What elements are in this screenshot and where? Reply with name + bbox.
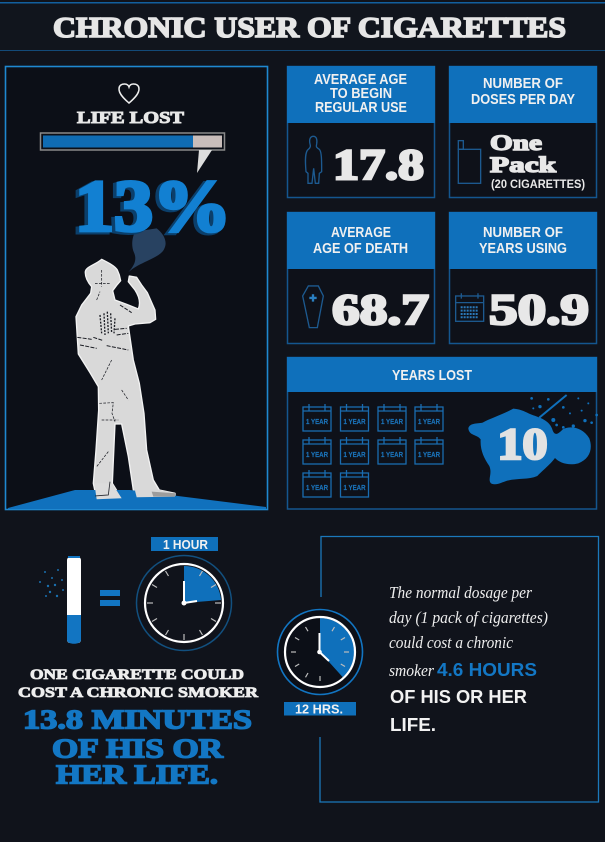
callout pointer [197, 150, 212, 173]
big percentage: 13% [72, 167, 228, 248]
panel: normal dosage frame [320, 536, 598, 802]
label: 12 hrs: 12 HRS. [295, 702, 343, 716]
shoes over floor [94, 482, 175, 499]
calendars grid: 1 YEAR [344, 417, 366, 426]
value: 68.7 [332, 287, 429, 334]
panel: years lost [287, 357, 598, 509]
panel: number of years using [449, 212, 597, 344]
icon: calendar [456, 293, 484, 321]
icon: cigarette pack [458, 141, 481, 183]
calendars grid: 1 YEAR [381, 417, 403, 426]
title banner: CHRONIC USER OF CIGARETTES [53, 12, 566, 44]
label [471, 76, 575, 108]
calendars grid: 1 YEAR [344, 483, 366, 492]
calendars grid: 1 YEAR [306, 483, 328, 492]
text: normal dosage: OF HIS OR HER [390, 686, 527, 707]
text: normal dosage: smoker [389, 661, 434, 680]
text: 13.8 minutes of his or her life: OF HIS OR [52, 734, 224, 764]
icon: cigarette [39, 556, 81, 644]
label [313, 225, 408, 257]
value: 10 [498, 420, 548, 468]
label: REGULAR USE [315, 100, 407, 116]
text: normal dosage: could cost a chronic [389, 633, 513, 652]
label: NUMBER OF [483, 76, 563, 92]
big percentage: 13% [75, 166, 231, 246]
text: normal dosage: The normal dosage per [389, 583, 532, 602]
calendars grid: 1 YEAR [306, 417, 328, 426]
calendars grid: 1 YEAR [381, 450, 403, 459]
value: Pack [490, 152, 557, 177]
calendars grid: 1 YEAR [306, 450, 328, 459]
value: (20 CIGARETTES) [491, 177, 585, 191]
heading: YEARS LOST [392, 367, 472, 384]
label: DOSES PER DAY [471, 92, 575, 108]
calendars grid: 1 YEAR [344, 450, 366, 459]
value: 17.8 [333, 142, 424, 189]
floor [8, 490, 266, 509]
calendars grid: 1 YEAR [418, 450, 440, 459]
ink splat [468, 395, 598, 484]
smoke [128, 228, 166, 272]
clock: 1 hour [136, 537, 232, 650]
text: normal dosage [389, 583, 548, 735]
label: AVERAGE AGE [314, 72, 407, 88]
calendars grid: 1 YEAR [418, 417, 440, 426]
text: normal dosage: LIFE. [390, 714, 436, 735]
text: one cigarette could cost: ONE CIGARETTE COULD [30, 667, 244, 683]
text: normal dosage: day (1 pack of cigarettes) [389, 608, 548, 627]
panel: number of doses per day [449, 66, 597, 198]
label: 1 hour: 1 HOUR [163, 538, 208, 552]
text: one cigarette could cost [18, 667, 259, 701]
label: TO BEGIN [330, 86, 392, 102]
calendars grid [303, 404, 443, 497]
label: YEARS USING [479, 241, 567, 257]
label [314, 72, 407, 116]
text: one cigarette could cost: COST A CHRONIC SMOKER [18, 685, 259, 701]
text: 13.8 minutes of his or her life: HER LIFE. [56, 760, 218, 790]
label: AVERAGE [331, 225, 391, 241]
progress bar [40, 133, 224, 150]
equals sign [100, 590, 120, 606]
icon: coffin [303, 286, 323, 328]
title banner [0, 2, 605, 51]
man silhouette [76, 259, 175, 499]
panel: average age of death [287, 212, 435, 344]
clock: 12 hours [278, 610, 362, 716]
label: AGE OF DEATH [313, 241, 408, 257]
text: 13.8 minutes of his or her life [23, 704, 252, 790]
panel: average age to begin regular use [287, 66, 435, 198]
value: 50.9 [489, 287, 589, 334]
panel: life lost [6, 66, 268, 510]
icon: person [305, 136, 322, 183]
value [490, 130, 585, 191]
heading: life lost: LIFE LOST [77, 108, 185, 127]
icon: heart [119, 84, 139, 103]
text: 13.8 minutes of his or her life: 13.8 MINUTES [23, 704, 252, 734]
label [479, 225, 567, 257]
value: One [490, 130, 542, 155]
label: NUMBER OF [483, 225, 563, 241]
text: normal dosage: 4.6 HOURS [437, 659, 537, 680]
